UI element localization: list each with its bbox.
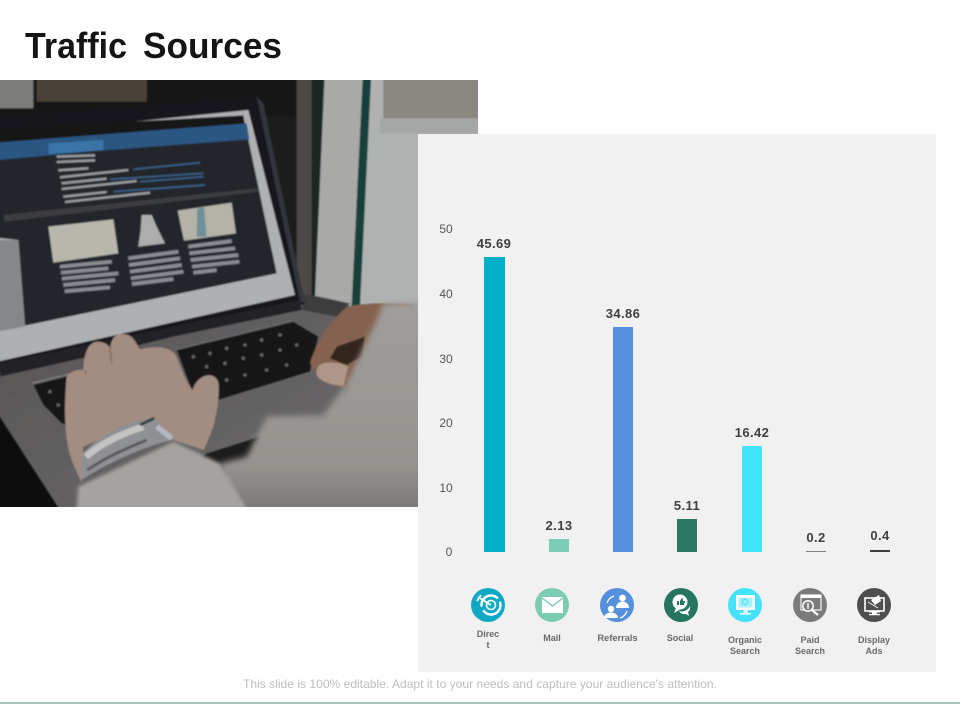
category labels: Organic (728, 635, 762, 645)
y axis labels: 10 (439, 481, 453, 495)
bar value labels: 0.4 (870, 528, 890, 543)
panel: chart background (418, 134, 936, 672)
y axis labels: 0 (446, 545, 453, 559)
footer note: This slide is 100% editable. Adapt it to your needs and capture your audience's attention. (243, 677, 717, 691)
bar value labels (477, 236, 890, 545)
category labels: Search (795, 646, 825, 656)
category labels: Ads (865, 646, 883, 656)
icon: organic search monitor (728, 588, 762, 622)
y axis labels: 40 (439, 287, 453, 301)
bar value labels: 34.86 (606, 306, 640, 321)
category labels: Direc (477, 629, 499, 639)
bar value labels: 5.11 (674, 498, 700, 513)
icon: referrals people (600, 588, 634, 622)
y axis labels (439, 222, 453, 559)
icon: paid search browser (793, 588, 827, 622)
icon: display ads monitor (857, 588, 891, 622)
bar value labels: 0.2 (806, 530, 826, 545)
icon: mail envelope (535, 588, 569, 622)
y axis labels: 30 (439, 352, 453, 366)
category labels: t (486, 640, 490, 650)
category labels: Search (730, 646, 760, 656)
bar value labels: 45.69 (477, 236, 511, 251)
icon: social chat bubble (664, 588, 698, 622)
category labels: Mail (543, 633, 561, 643)
photo: hands typing on a laptop (0, 67, 493, 523)
footer line (0, 702, 960, 704)
category labels (477, 629, 890, 656)
category labels: Referrals (597, 633, 638, 643)
title: Traffic (25, 25, 127, 66)
bar value labels: 2.13 (546, 518, 572, 533)
category labels: Social (667, 633, 693, 643)
icon: direct target (471, 588, 505, 622)
bar chart (484, 257, 890, 552)
category labels: Display (858, 635, 890, 645)
category labels: Paid (800, 635, 820, 645)
title: Sources (143, 25, 282, 66)
y axis labels: 50 (439, 222, 453, 236)
y axis labels: 20 (439, 416, 453, 430)
bar value labels: 16.42 (735, 425, 769, 440)
